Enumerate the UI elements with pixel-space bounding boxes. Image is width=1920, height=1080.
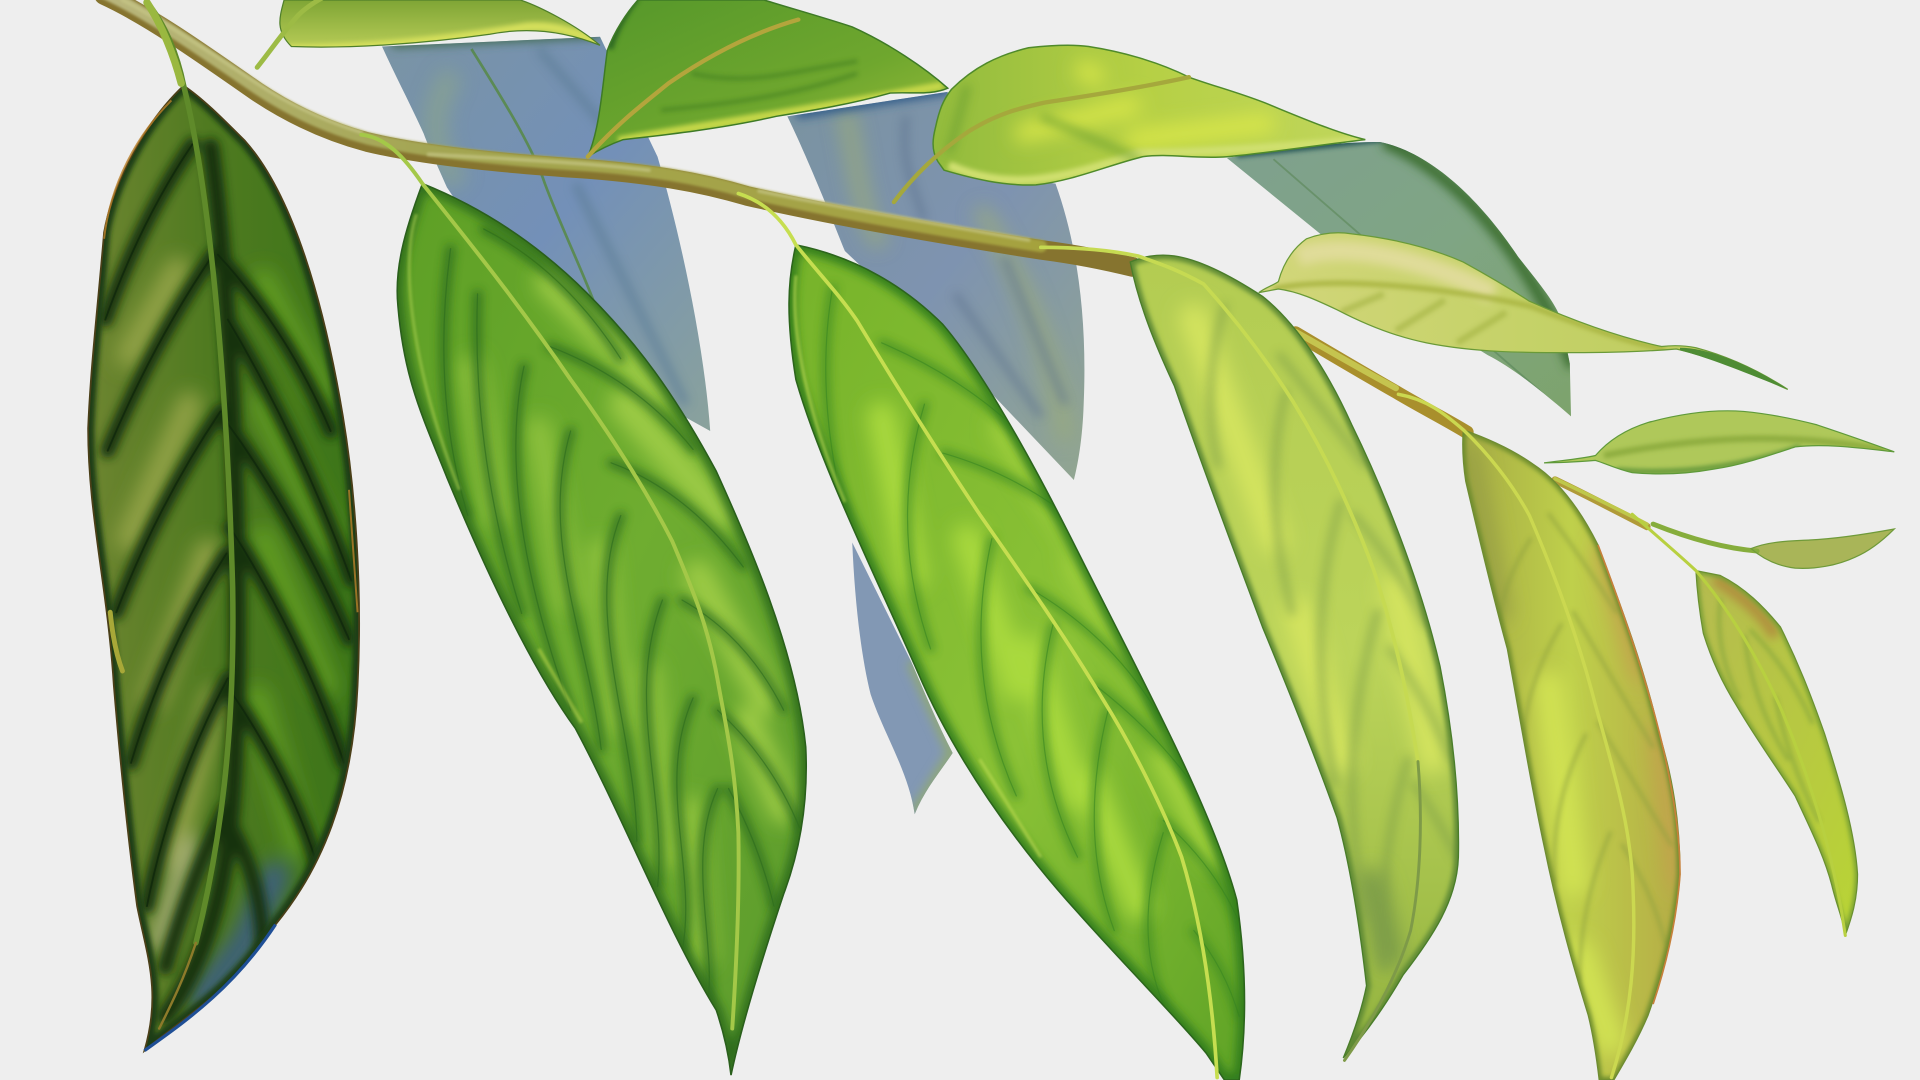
edge shading: leaf 3 xyxy=(789,245,1244,1080)
light patches: leaf 3 xyxy=(882,416,1212,906)
tip: pale young leaf xyxy=(1680,348,1788,389)
midrib: leaf 5 xyxy=(1398,394,1634,1078)
midrib: top centre leaf xyxy=(588,20,798,157)
leaf: top centre xyxy=(588,0,948,157)
leaf: blue underside behind third leaf xyxy=(787,88,1084,480)
petiole: top left leaf xyxy=(257,0,333,67)
veins: leaf 2 xyxy=(444,229,800,1003)
pale fold: leaf 1 xyxy=(110,612,122,671)
edge shading: leaf 1 xyxy=(88,86,359,1051)
veins: leaf 3 xyxy=(826,288,1243,1016)
leaf 5: olive yellow xyxy=(1398,394,1680,1080)
midrib: leaf 2 xyxy=(361,135,739,1029)
leaf 3: bright green xyxy=(738,193,1244,1080)
leaf 1: dark green xyxy=(88,2,359,1051)
leaf 4: yellow green xyxy=(1041,247,1458,1060)
orange rim: leaf 1 xyxy=(104,100,358,612)
leaf: grey-green underside at upper right xyxy=(1227,137,1573,416)
light patches: leaf 1 xyxy=(129,269,331,998)
leaf: small right lower xyxy=(1653,524,1894,568)
edge shading: leaf 5 xyxy=(1463,430,1680,1080)
blue rim: leaf 1 xyxy=(144,924,276,1051)
veins: leaf 5 xyxy=(1500,514,1671,980)
leaf: blue tip below third leaf xyxy=(852,542,953,814)
midrib: leaf 6 xyxy=(1632,514,1845,936)
light patches: leaf 5 xyxy=(1469,453,1678,1041)
leaf: top right bright xyxy=(894,45,1365,202)
orange rim: leaf 5 xyxy=(1598,545,1680,1004)
midrib: top right leaf xyxy=(894,77,1189,202)
leaf 6: small yellow green xyxy=(1632,514,1858,936)
light patches: leaf 4 xyxy=(1194,318,1433,955)
main stem xyxy=(104,0,1647,527)
midrib: leaf 4 xyxy=(1041,247,1418,762)
veins: leaf 1 xyxy=(105,144,351,1016)
edge shading: leaf 2 xyxy=(397,184,806,1075)
leaf: pale young leaf xyxy=(1259,233,1788,389)
edge shading: leaf 4 xyxy=(1130,255,1458,1058)
leaf: blue underside behind second leaf xyxy=(382,31,710,431)
light patches: leaf 2 xyxy=(471,282,784,955)
leaf: top left partial xyxy=(257,0,600,67)
midrib: leaf 3 xyxy=(738,193,1217,1078)
midrib: leaf 1 xyxy=(147,2,233,943)
veins: leaf 4 xyxy=(1202,302,1454,880)
leaf: small right upper xyxy=(1544,411,1894,474)
leaf 2: mid green xyxy=(361,135,806,1075)
